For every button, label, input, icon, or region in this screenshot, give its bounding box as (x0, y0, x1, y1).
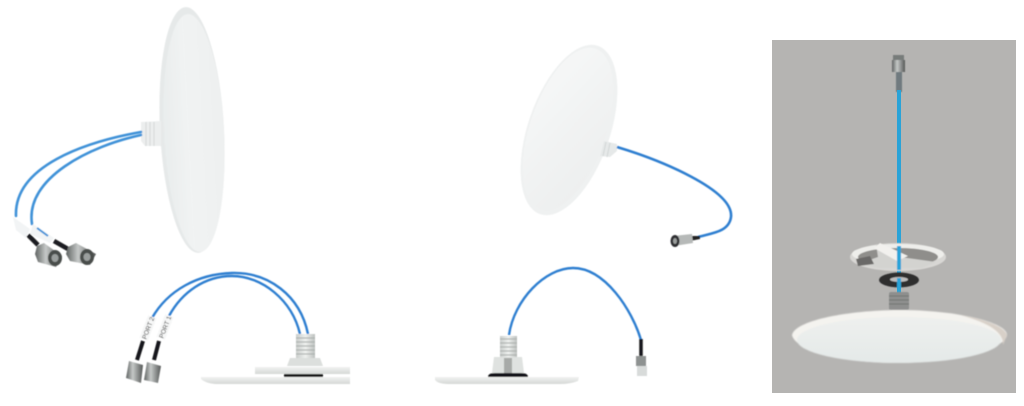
mounting ring (850, 243, 946, 271)
threaded stud (600, 141, 617, 157)
black gasket (488, 373, 528, 377)
threaded stud (889, 292, 909, 310)
grey background (772, 40, 1016, 393)
flat dish (435, 377, 579, 384)
dish (501, 33, 637, 227)
right connector (66, 243, 96, 265)
hex nut (492, 357, 524, 373)
antenna: single-port profile view (435, 268, 647, 384)
flat dish (792, 310, 1007, 363)
threaded stud (141, 121, 161, 146)
dish (154, 5, 230, 255)
flat dish (201, 377, 350, 384)
connector (670, 234, 700, 247)
antenna: two-port profile view (126, 273, 350, 384)
left connector (35, 243, 62, 267)
label: PORT 1: PORT 1 (158, 315, 173, 339)
threaded stud (296, 334, 315, 358)
antenna: single-port angled view (501, 33, 731, 247)
blue cables (16, 132, 141, 224)
blue cable (897, 90, 901, 293)
hex nut and flange (255, 358, 350, 374)
connectors (126, 361, 161, 383)
antenna: two-port side angle view (13, 5, 230, 267)
cable connector (892, 55, 905, 92)
label: PORT 2: PORT 2 (141, 316, 156, 340)
black washer (879, 272, 919, 288)
blue cable (509, 268, 641, 340)
connector (636, 356, 647, 376)
black gasket (284, 374, 323, 377)
cable boots (137, 341, 159, 360)
threaded stud (500, 336, 517, 357)
blue cable (617, 147, 731, 237)
cable boot (639, 339, 643, 356)
blue cables (152, 273, 308, 334)
port labels on cables (13, 217, 54, 243)
panel: exploded assembly on grey background (772, 40, 1016, 393)
black cable boots (28, 235, 68, 249)
